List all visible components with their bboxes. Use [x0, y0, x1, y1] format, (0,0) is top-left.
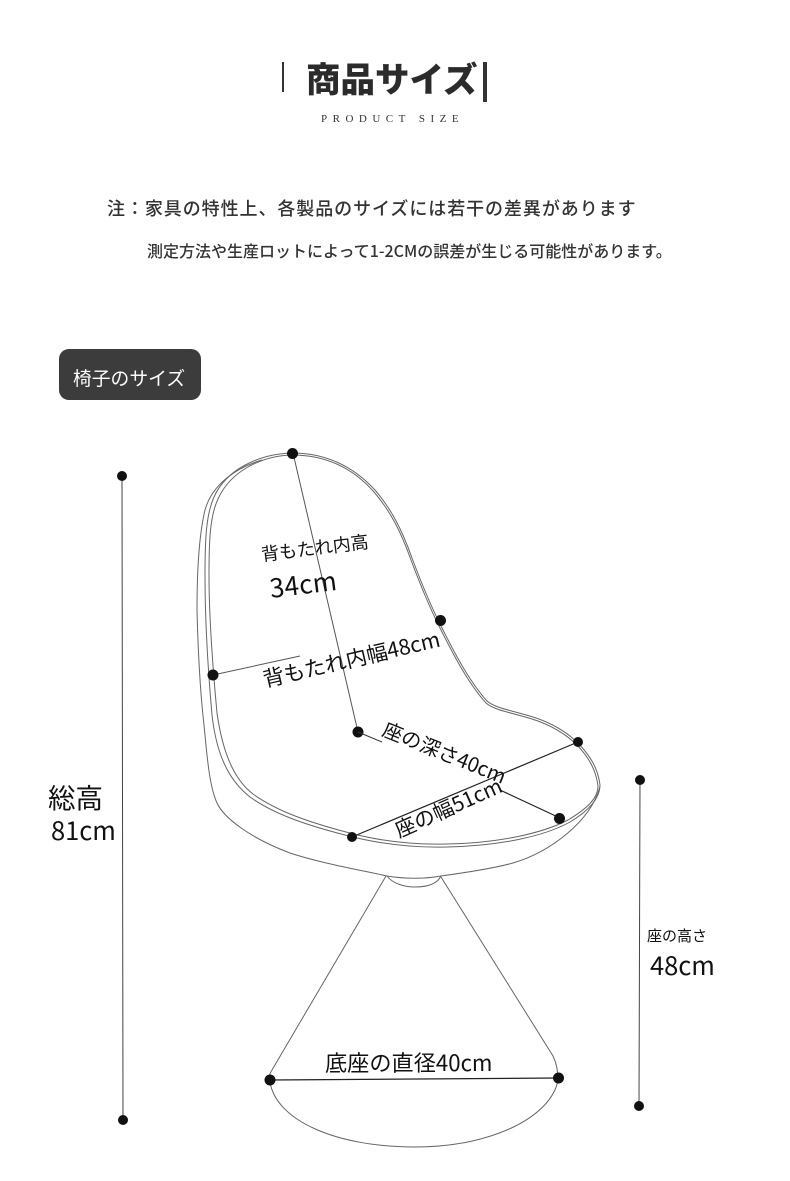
base disc [270, 1080, 558, 1147]
label: seat height: 座の高さ [647, 925, 707, 946]
title text: 商品サイズ [306, 52, 477, 102]
title right bar [483, 62, 487, 102]
seat width line [347, 737, 583, 842]
label: seat depth: 座の深さ40cm [379, 714, 511, 790]
seat height line [634, 775, 645, 1111]
section label: chair size [59, 349, 201, 400]
value: 34cm: 34cm [267, 561, 339, 606]
title left bar [282, 62, 284, 92]
chair outer shell [197, 460, 600, 878]
section label: chair size: 椅子のサイズ [73, 364, 185, 391]
value: 48cm: 48cm [650, 946, 715, 983]
back inner height line [287, 448, 364, 738]
chair seat and back outline [197, 453, 600, 1147]
label: back inner height: 背もたれ内高 [260, 528, 370, 567]
title [282, 52, 487, 102]
note line 1: 注：家具の特性上、各製品のサイズには若干の差異があります [107, 195, 636, 221]
back inner width line [208, 615, 446, 680]
label: total height: 総高 [48, 776, 103, 816]
base stem right edge [441, 877, 558, 1080]
value: 81cm: 81cm [51, 811, 116, 848]
seat depth line [358, 732, 565, 824]
label: base diameter: 底座の直径40cm [325, 1046, 492, 1078]
subtitle: PRODUCT SIZE [321, 113, 464, 125]
label: seat width: 座の幅51cm [389, 769, 506, 843]
base diameter line [264, 1072, 564, 1086]
total height line [117, 471, 128, 1125]
note line 2: 測定方法や生産ロットによって1-2CMの誤差が生じる可能性があります。 [147, 238, 672, 262]
label: back inner width: 背もたれ内幅48cm [260, 623, 443, 694]
base hub [387, 876, 441, 887]
base stem left edge [269, 876, 386, 1082]
